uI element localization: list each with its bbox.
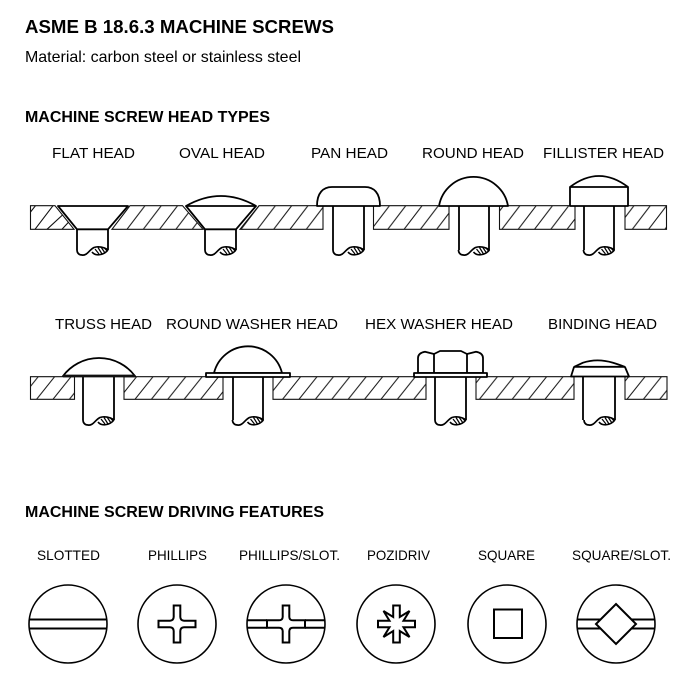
drive: pozidriv — [357, 547, 435, 663]
label: round head: ROUND HEAD — [422, 145, 524, 162]
label: round washer head: ROUND WASHER HEAD — [166, 316, 338, 333]
label: phillips: PHILLIPS — [148, 547, 207, 563]
label: binding head: BINDING HEAD — [548, 316, 657, 333]
label: fillister head: FILLISTER HEAD — [543, 145, 664, 162]
drive: square slotted — [572, 547, 671, 663]
label: oval head: OVAL HEAD — [179, 145, 265, 162]
screw: flat head — [52, 145, 135, 255]
panel: head types row 1 — [30, 145, 666, 255]
screw: round washer head — [166, 316, 338, 425]
screw: hex washer head — [365, 316, 513, 425]
drive: square — [468, 547, 546, 663]
screw: fillister head — [543, 145, 664, 255]
label: hex washer head: HEX WASHER HEAD — [365, 316, 513, 333]
drive: phillips — [138, 547, 216, 663]
drive: slotted — [29, 547, 107, 663]
label: pozidriv: POZIDRIV — [367, 547, 431, 563]
label: phillips slot: PHILLIPS/SLOT. — [239, 547, 340, 563]
screw: round head — [422, 145, 524, 255]
label: slotted: SLOTTED — [37, 547, 100, 563]
label: square: SQUARE — [478, 547, 535, 563]
screw: pan head — [311, 145, 388, 255]
panel: head types row 2 — [30, 316, 667, 425]
screw: truss head — [55, 316, 152, 425]
panel: driving features — [29, 547, 671, 663]
label: truss head: TRUSS HEAD — [55, 316, 152, 333]
plate sections row 1 — [30, 206, 666, 229]
drive: phillips slotted — [239, 547, 340, 663]
label: pan head: PAN HEAD — [311, 145, 388, 162]
heading: head types: MACHINE SCREW HEAD TYPES — [25, 109, 270, 126]
heading: driving features: MACHINE SCREW DRIVING FEATURES — [25, 504, 324, 521]
label: flat head: FLAT HEAD — [52, 145, 135, 162]
title: ASME B 18.6.3 MACHINE SCREWS — [25, 17, 334, 37]
plate sections row 2 — [30, 377, 667, 399]
label: square slot: SQUARE/SLOT. — [572, 547, 671, 563]
screw: binding head — [548, 316, 657, 425]
screw: oval head — [179, 145, 265, 255]
material note: Material: carbon steel or stainless steel — [25, 49, 301, 66]
